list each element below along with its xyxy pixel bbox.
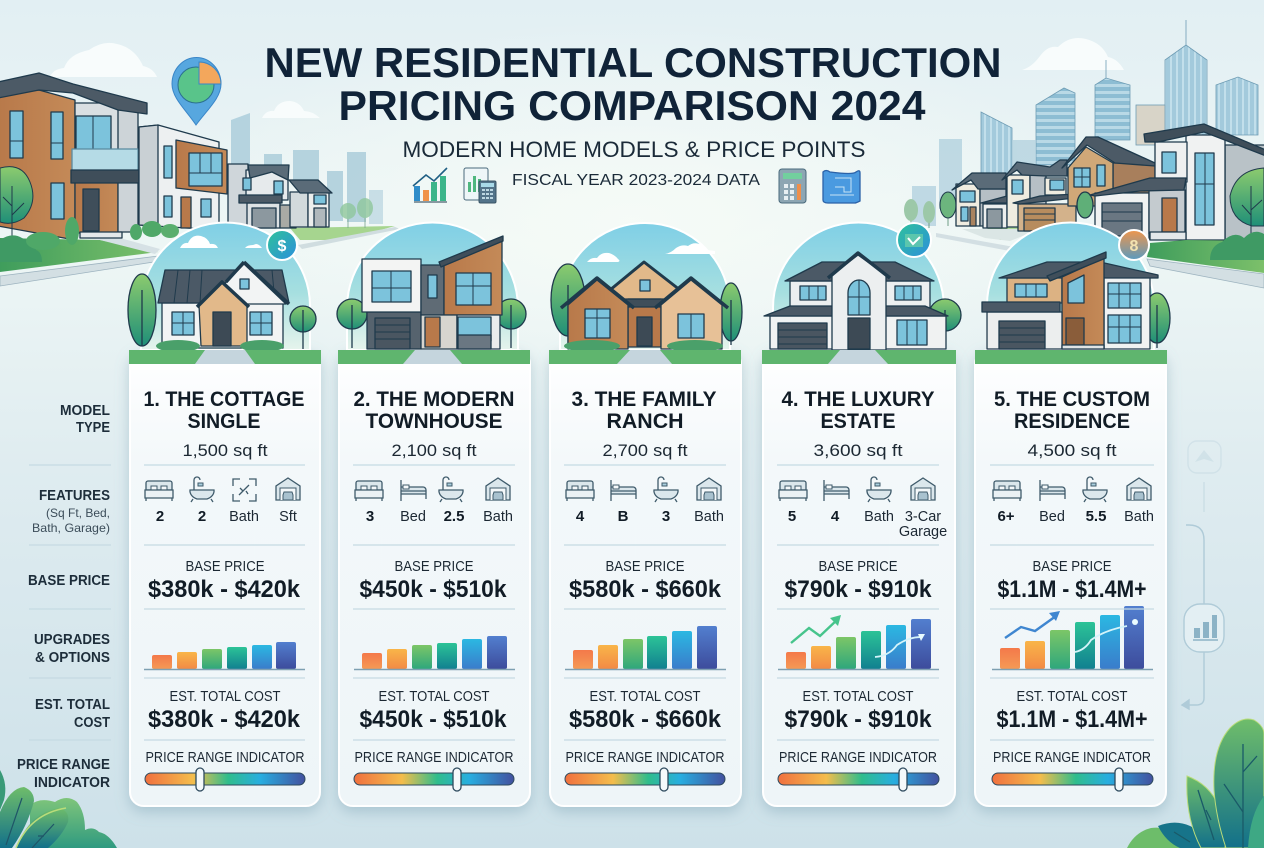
price range indicator: PRICE RANGE INDICATOR xyxy=(566,750,724,766)
row house B xyxy=(1002,160,1076,231)
model name: RANCH xyxy=(606,409,684,433)
label: features: (Sq Ft, Bed, xyxy=(46,506,110,520)
model name: 5. THE CUSTOM xyxy=(994,387,1150,411)
base price: $450k - $510k xyxy=(360,576,507,603)
label: model type: TYPE xyxy=(76,420,110,436)
square footage: 2,700 sq ft xyxy=(602,441,688,460)
fiscal year line: FISCAL YEAR 2023-2024 DATA xyxy=(512,172,761,189)
estimated total cost: $580k - $660k xyxy=(569,706,722,733)
dome xyxy=(141,223,310,350)
base price: BASE PRICE xyxy=(606,559,685,575)
model name xyxy=(354,387,514,433)
label: estimated total cost: EST. TOTAL xyxy=(35,697,110,713)
features: Bath xyxy=(694,509,724,525)
model name: 4. THE LUXURY xyxy=(782,387,934,411)
estimated total cost xyxy=(784,689,932,733)
estimated total cost xyxy=(360,689,507,733)
features xyxy=(993,477,1154,525)
icon: blueprint xyxy=(823,170,860,203)
base price xyxy=(569,559,722,603)
dome xyxy=(773,222,944,350)
dome xyxy=(347,222,518,350)
price range indicator xyxy=(354,750,514,791)
label: model type xyxy=(60,403,110,436)
model name: 1. THE COTTAGE xyxy=(144,387,304,411)
label: base price: BASE PRICE xyxy=(28,573,110,589)
estimated total cost xyxy=(569,689,722,733)
features: 6+ xyxy=(997,508,1015,525)
house: custom residence xyxy=(982,252,1158,349)
estimated total cost xyxy=(996,689,1148,733)
features xyxy=(145,477,300,525)
features: Bath xyxy=(864,509,894,525)
walkway xyxy=(828,350,888,364)
title: NEW RESIDENTIAL CONSTRUCTION xyxy=(264,39,1002,86)
badge xyxy=(1119,230,1149,260)
house: estate xyxy=(764,253,948,350)
estimated total cost: EST. TOTAL COST xyxy=(170,689,281,705)
third house xyxy=(228,164,296,228)
estimated total cost: EST. TOTAL COST xyxy=(802,689,914,705)
far trees xyxy=(904,192,956,228)
tree and bushes xyxy=(0,167,179,262)
estimated total cost: EST. TOTAL COST xyxy=(590,689,701,705)
walkway xyxy=(617,350,672,364)
grass strip xyxy=(129,350,321,364)
house C xyxy=(1062,137,1155,218)
model name: SINGLE xyxy=(188,409,260,433)
right city scene xyxy=(904,20,1264,288)
base price: $580k - $660k xyxy=(569,576,722,603)
price range indicator xyxy=(992,750,1153,791)
base price: BASE PRICE xyxy=(1032,559,1112,575)
label: upgrades and options: & OPTIONS xyxy=(35,650,110,666)
house: townhouse xyxy=(362,236,503,349)
features: Sft xyxy=(279,509,297,525)
label column xyxy=(17,403,111,791)
card background xyxy=(763,350,955,806)
features: B xyxy=(618,508,629,525)
lawn xyxy=(0,238,158,272)
left neighbourhood scene xyxy=(0,73,400,286)
base price: $380k - $420k xyxy=(148,576,301,603)
label: features: FEATURES xyxy=(39,488,110,504)
far house xyxy=(289,180,332,227)
leaves: bottom right xyxy=(1127,719,1264,848)
features: 5.5 xyxy=(1086,508,1106,525)
features: 2.5 xyxy=(444,508,464,525)
base price: BASE PRICE xyxy=(186,559,265,575)
walkway xyxy=(195,350,255,364)
label: estimated total cost: COST xyxy=(74,715,110,731)
clouds in dome xyxy=(180,236,262,248)
right skyline xyxy=(912,20,1258,226)
features xyxy=(566,477,724,525)
square footage: 3,600 sq ft xyxy=(814,441,903,460)
features: 4 xyxy=(831,508,840,525)
features: 3 xyxy=(662,508,670,525)
label: upgrades and options xyxy=(34,632,110,666)
title xyxy=(264,39,1002,129)
upgrades bar chart xyxy=(354,636,515,670)
trees xyxy=(337,299,526,348)
features: 5 xyxy=(788,508,796,525)
label: price range indicator: PRICE RANGE xyxy=(17,757,110,773)
panel: 1 the cottage single xyxy=(128,223,321,806)
estimated total cost: EST. TOTAL COST xyxy=(1016,689,1128,705)
model name: ESTATE xyxy=(820,409,896,433)
label: estimated total cost xyxy=(35,697,110,731)
label: price range indicator: INDICATOR xyxy=(34,775,111,791)
row house A xyxy=(952,173,1007,228)
big modern house xyxy=(0,73,147,240)
square footage: 1,500 sq ft xyxy=(182,441,268,460)
features: 4 xyxy=(576,508,585,525)
features: 3 xyxy=(366,508,374,525)
house: ranch xyxy=(561,262,728,352)
walkway xyxy=(403,350,462,364)
panel: 2 the modern townhouse xyxy=(337,222,530,806)
features xyxy=(779,477,947,540)
upgrades bar chart xyxy=(565,626,726,670)
house: cottage xyxy=(156,262,289,352)
features xyxy=(355,477,513,525)
clouds in dome xyxy=(587,243,715,262)
square footage: 2,100 sq ft xyxy=(392,441,477,460)
badge: $ xyxy=(278,238,287,255)
estimated total cost: $380k - $420k xyxy=(148,706,301,733)
upgrades bar chart xyxy=(144,642,305,670)
icon: growth chart xyxy=(413,168,447,202)
right street strips xyxy=(932,226,1060,240)
price range indicator xyxy=(778,750,939,791)
features: Garage xyxy=(899,524,947,540)
dome xyxy=(987,223,1154,350)
card top cover xyxy=(551,364,740,370)
model name: 3. THE FAMILY xyxy=(572,387,716,411)
card background xyxy=(130,350,320,806)
features: Bath xyxy=(483,509,513,525)
card top cover xyxy=(340,364,529,370)
base price xyxy=(784,559,932,603)
clouds xyxy=(50,38,1124,118)
panel: 3 the family ranch xyxy=(549,223,742,806)
panel: 5 the custom residence xyxy=(975,223,1170,806)
features: 3-Car xyxy=(905,509,941,525)
price range indicator: PRICE RANGE INDICATOR xyxy=(993,750,1151,766)
base price xyxy=(998,559,1146,603)
leaves: bottom left xyxy=(0,770,117,848)
upgrades bar chart with trend arrows xyxy=(778,615,939,670)
dome xyxy=(560,223,730,350)
base price: BASE PRICE xyxy=(818,559,898,575)
panel: 4 the luxury estate xyxy=(762,222,961,806)
base price: $790k - $910k xyxy=(784,576,932,603)
label: price range indicator xyxy=(17,757,111,791)
icon: map pin pie chart xyxy=(172,57,221,125)
model name: TOWNHOUSE xyxy=(366,409,502,433)
label: model type: MODEL xyxy=(60,403,110,419)
model name xyxy=(782,387,934,433)
model name: RESIDENCE xyxy=(1014,409,1130,433)
right tree and bushes xyxy=(1210,168,1264,260)
features: Bath xyxy=(229,509,259,525)
right lawn and sidewalk xyxy=(1147,240,1264,273)
price range indicator: PRICE RANGE INDICATOR xyxy=(354,750,514,766)
model name xyxy=(144,387,304,433)
far trees xyxy=(340,198,373,228)
icon: calculator xyxy=(779,169,806,203)
far right street strip xyxy=(290,226,395,240)
badge xyxy=(267,230,297,260)
right side connector with icons xyxy=(1182,441,1224,709)
base price xyxy=(360,559,507,603)
second house xyxy=(139,125,227,230)
estimated total cost: $790k - $910k xyxy=(784,706,932,733)
model name xyxy=(994,387,1150,433)
price range indicator xyxy=(565,750,725,791)
card top cover xyxy=(131,364,319,370)
base price: $1.1M - $1.4M+ xyxy=(998,576,1146,603)
price range indicator xyxy=(145,750,305,791)
estimated total cost: $1.1M - $1.4M+ xyxy=(996,706,1148,733)
grass strip xyxy=(549,350,741,364)
grass strip xyxy=(338,350,530,364)
icon: report and calculator xyxy=(464,168,496,203)
upgrades bar chart with trend arrows xyxy=(992,606,1153,670)
badge xyxy=(897,223,931,257)
trees xyxy=(128,274,316,349)
card background xyxy=(550,350,741,806)
card background xyxy=(339,350,530,806)
sidewalk xyxy=(0,256,160,286)
estimated total cost: $450k - $510k xyxy=(360,706,507,733)
square footage: 4,500 sq ft xyxy=(1028,441,1117,460)
base price xyxy=(148,559,301,603)
features: Bed xyxy=(1039,509,1065,525)
grass strip xyxy=(762,350,956,364)
trees xyxy=(551,264,742,345)
subtitle: MODERN HOME MODELS & PRICE POINTS xyxy=(402,137,866,162)
badge: 8 xyxy=(1130,238,1139,255)
large right house xyxy=(1090,124,1264,240)
price range indicator: PRICE RANGE INDICATOR xyxy=(146,750,304,766)
label: features: Bath, Garage) xyxy=(32,521,110,535)
card top cover xyxy=(976,364,1165,370)
card background xyxy=(975,350,1166,806)
driveway xyxy=(80,238,160,254)
price range indicator: PRICE RANGE INDICATOR xyxy=(779,750,937,766)
label: upgrades and options: UPGRADES xyxy=(34,632,110,648)
card top cover xyxy=(764,364,954,370)
model name xyxy=(572,387,716,433)
grass strip xyxy=(975,350,1167,364)
trees xyxy=(1144,293,1170,348)
features: 2 xyxy=(156,508,164,525)
trees xyxy=(929,299,961,348)
label: features xyxy=(32,488,110,535)
base price: BASE PRICE xyxy=(394,559,474,575)
features: 2 xyxy=(198,508,206,525)
left skyline xyxy=(231,113,383,224)
title: PRICING COMPARISON 2024 xyxy=(338,82,926,129)
model name: 2. THE MODERN xyxy=(354,387,514,411)
features: Bath xyxy=(1124,509,1154,525)
features: Bed xyxy=(400,509,426,525)
estimated total cost: EST. TOTAL COST xyxy=(378,689,490,705)
estimated total cost xyxy=(148,689,301,733)
